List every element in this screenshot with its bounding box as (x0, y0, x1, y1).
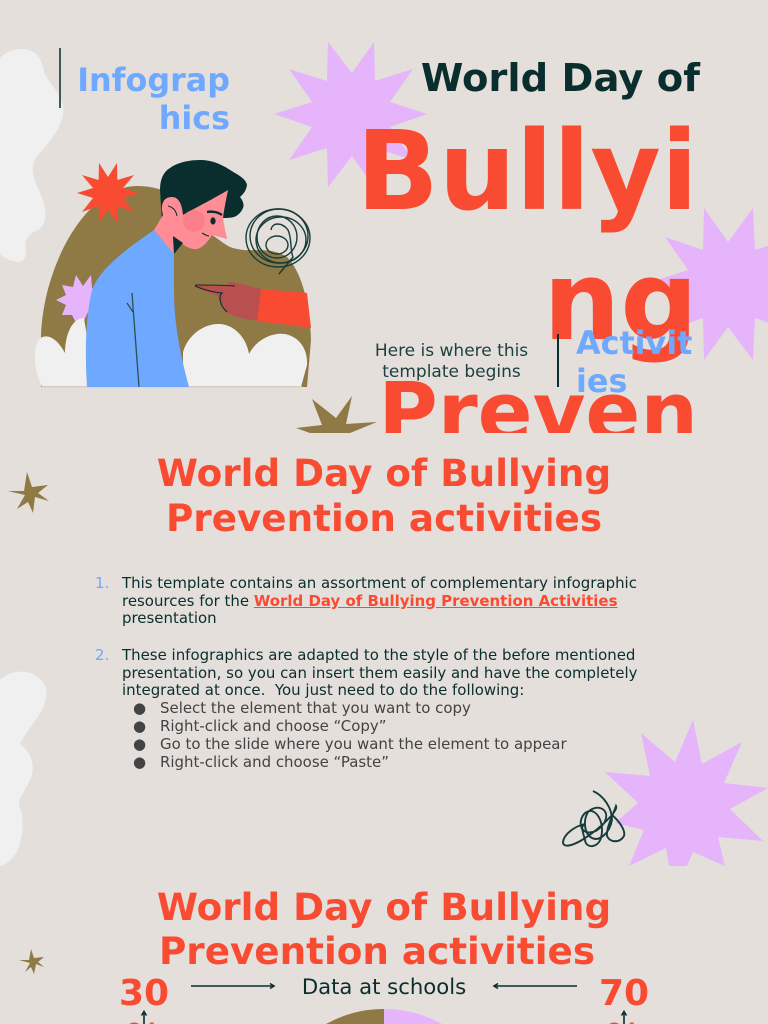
item 2 text (122, 646, 637, 699)
bullet text (160, 699, 567, 771)
heading (157, 885, 611, 973)
heading: World Day of Bullying (157, 451, 611, 495)
shirt crease (127, 293, 139, 387)
hair (160, 160, 247, 225)
item 1 text: This template contains an assortment of complementary infographic (122, 574, 637, 592)
numbered list (95, 574, 637, 771)
heading: Prevention activities (159, 929, 595, 973)
bullet markers: ● (133, 753, 146, 771)
man torso (86, 230, 189, 387)
heading (157, 451, 611, 540)
mouth (202, 233, 209, 236)
eye and brow (207, 212, 222, 215)
title: Bullying: Bullyi (356, 107, 698, 235)
label: Activities: Activit (576, 325, 692, 362)
value 30: 30 (119, 973, 169, 1014)
bullet markers: ● (133, 735, 146, 753)
bullet text: Right-click and choose “Paste” (160, 753, 389, 771)
face and neck (154, 190, 228, 254)
brown star (8, 472, 49, 513)
purple star lower right (605, 720, 768, 866)
collar shadow (173, 236, 183, 254)
item 1 number: 1. (95, 574, 109, 592)
scribble lower (563, 791, 624, 846)
item 1 text: presentation (122, 609, 217, 627)
ear detail (168, 206, 177, 216)
bullet markers: ● (133, 717, 146, 735)
item 2 number: 2. (95, 646, 109, 664)
label: Infographics: hics (159, 100, 230, 137)
white blob left lower (0, 672, 47, 866)
label: Activities: ies (576, 363, 627, 400)
subtitle text: template begins (382, 362, 521, 382)
background decorations (0, 472, 768, 866)
bullet markers: ● (133, 699, 146, 717)
red sleeve (257, 289, 311, 328)
heading: World Day of Bullying (157, 885, 611, 929)
background decorations (0, 42, 768, 433)
slide 2: instructions (0, 451, 768, 866)
ground line (42, 386, 302, 388)
item 2 text: presentation, so you can insert them easily and have the completely (122, 664, 637, 682)
arrows (142, 984, 626, 1024)
vertical line by Activities (557, 334, 559, 387)
bullet text: Go to the slide where you want the element to appear (160, 735, 567, 753)
brown star bottom (296, 396, 377, 433)
pointing hand (195, 282, 261, 321)
red star (77, 163, 139, 223)
item 1 text: resources for the World Day of Bullying Prevention Activities (122, 592, 617, 610)
slide 3: data (19, 885, 649, 1024)
brown arch (41, 186, 311, 387)
white clouds (35, 318, 95, 387)
title: Bullying: ng (543, 237, 698, 365)
slide 1: cover (0, 42, 768, 433)
purple star right (645, 208, 768, 360)
title: Bullying (356, 107, 698, 365)
item 1 text (122, 574, 637, 627)
heading: Prevention activities (166, 496, 602, 540)
label: Activities (576, 325, 692, 400)
small purple star (56, 275, 100, 325)
brown star small (19, 949, 44, 974)
chart and decorations (19, 949, 628, 1024)
label: Infographics: Infograp (77, 62, 230, 99)
value 70: 70 (599, 973, 649, 1014)
pie chart (326, 1009, 442, 1024)
item 2 text: These infographics are adapted to the style of the before mentioned (122, 646, 635, 664)
bullet text: Right-click and choose “Copy” (160, 717, 386, 735)
item 2 text: integrated at once. You just need to do the following: (122, 681, 524, 699)
chart label: Data at schools (302, 974, 466, 999)
blush (183, 210, 205, 232)
vertical line by Infographics (59, 48, 61, 108)
bullet text: Select the element that you want to copy (160, 699, 471, 717)
bullet markers (133, 699, 146, 771)
subtitle text (375, 341, 528, 382)
white blob left (0, 49, 63, 262)
scribble (246, 209, 310, 274)
label: Infographics (77, 62, 230, 137)
illustration: bullied man (35, 160, 311, 388)
subtitle text: Here is where this (375, 341, 528, 361)
purple star top (274, 42, 427, 187)
title: World Day of: World Day of (421, 56, 700, 101)
